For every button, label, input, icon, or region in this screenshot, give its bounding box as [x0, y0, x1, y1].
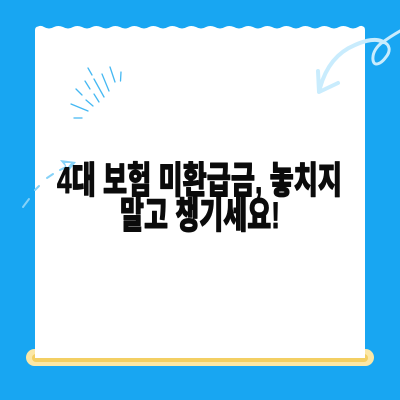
- icon: sunburst lines: [71, 67, 121, 118]
- icon: curly arrow: [318, 31, 400, 92]
- title: [57, 160, 342, 236]
- paper card with scalloped top: [35, 26, 365, 358]
- icon: paper plane with dashed trail: [23, 160, 76, 207]
- scroll bottom bar: [26, 349, 374, 366]
- title: 말고 챙기세요!: [120, 195, 280, 236]
